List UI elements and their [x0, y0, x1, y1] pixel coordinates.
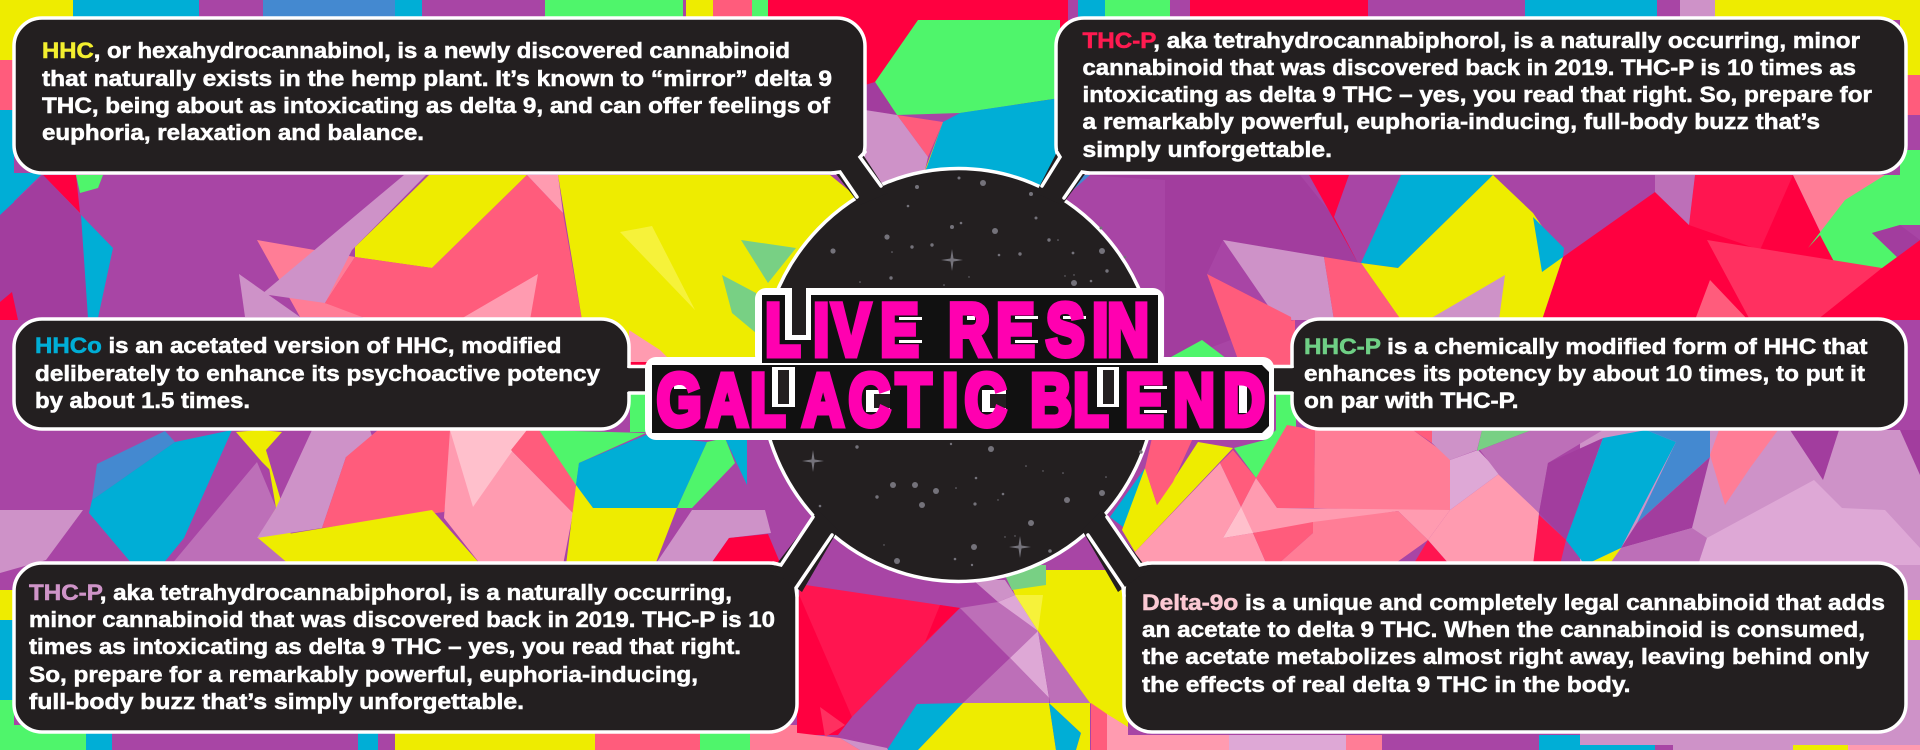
panel: HHC-P — [1292, 319, 1906, 429]
panel text: Delta-9o is a unique and completely legal cannabinoid that adds — [1142, 590, 1885, 615]
panel: THC-P top right — [1056, 18, 1906, 173]
panel text: that naturally exists in the hemp plant. It’s known to “mirror” delta 9 — [42, 66, 832, 91]
connector: bottom-right speech tail — [1082, 510, 1148, 596]
panel text — [42, 38, 832, 145]
star: four-point sparkle top — [941, 249, 963, 271]
panel box — [1292, 319, 1906, 429]
title: Live Resin Galactic Blend — [645, 285, 1274, 442]
panel text — [1142, 590, 1885, 697]
title counters and gaps — [674, 292, 1247, 413]
panel text: So, prepare for a remarkably powerful, euphoria-inducing, — [29, 662, 698, 687]
panel text: enhances its potency by about 10 times, to put it — [1304, 361, 1866, 386]
panel text: times as intoxicating as delta 9 THC – yes, you read that right. — [29, 634, 741, 659]
title white backing — [645, 288, 1274, 440]
panel text — [35, 333, 601, 413]
panel text: HHC-P is a chemically modified form of HHC that — [1304, 334, 1868, 359]
connector: left horizontal bar — [625, 366, 665, 393]
panel text: by about 1.5 times. — [35, 388, 250, 413]
panel: HHCo — [14, 319, 629, 429]
panel text: on par with THC-P. — [1304, 388, 1518, 413]
panel text: minor cannabinoid that was discovered back in 2019. THC-P is 10 — [29, 607, 775, 632]
connector: right horizontal bar — [1255, 366, 1296, 393]
panel text — [1082, 28, 1872, 162]
connector: bottom-left speech tail — [772, 510, 838, 596]
panel box — [14, 563, 797, 732]
panel text: THC-P , aka tetrahydrocannabiphorol, is a naturally occurring, minor — [1082, 28, 1860, 53]
connector: top-right speech tail — [1036, 150, 1089, 205]
title dark insets showing the starfield — [778, 285, 1114, 408]
panel text: simply unforgettable. — [1082, 137, 1332, 162]
panel text: deliberately to enhance its psychoactive potency — [35, 361, 601, 386]
panel text: a remarkably powerful, euphoria-inducing, full-body buzz that’s — [1082, 109, 1820, 134]
panel box — [14, 319, 629, 429]
title line 2: GALACTIC BLEND — [657, 360, 1265, 442]
panel text: euphoria, relaxation and balance. — [42, 120, 424, 145]
panel box — [1124, 563, 1906, 732]
panel text: THC, being about as intoxicating as delta 9, and can offer feelings of — [42, 93, 831, 118]
panel text: an acetate to delta 9 THC. When the cannabinoid is consumed, — [1142, 617, 1865, 642]
panel box — [14, 18, 865, 173]
central starfield circle — [760, 168, 1157, 582]
panel text: cannabinoid that was discovered back in 2019. THC-P is 10 times as — [1082, 55, 1856, 80]
title line 1: LIVE RESIN — [765, 290, 1149, 372]
stars: small dots — [819, 176, 1143, 566]
panel text: full-body buzz that’s simply unforgettable. — [29, 689, 524, 714]
circle disc — [760, 168, 1157, 582]
star: four-point sparkle right — [1009, 536, 1031, 558]
panel box — [1056, 18, 1906, 173]
panel text: the effects of real delta 9 THC in the body. — [1142, 672, 1630, 697]
panel text: intoxicating as delta 9 THC – yes, you read that right. So, prepare for — [1082, 82, 1872, 107]
panel text: THC-P , aka tetrahydrocannabiphorol, is a naturally occurring, — [29, 580, 732, 605]
title black backing — [652, 295, 1269, 433]
panel: HHC — [14, 18, 865, 173]
star: four-point sparkle left — [802, 450, 824, 472]
panel text: HHCo is an acetated version of HHC, modified — [35, 333, 561, 358]
connector: top-left speech tail — [832, 150, 888, 205]
panel text — [1304, 334, 1868, 413]
panel text — [29, 580, 775, 714]
panel: THC-P bottom left — [14, 563, 797, 732]
panel text: the acetate metabolizes almost right away, leaving behind only — [1142, 644, 1870, 669]
panel text: HHC, or hexahydrocannabinol, is a newly discovered cannabinoid — [42, 38, 790, 63]
panel: Delta-9o — [1124, 563, 1906, 732]
